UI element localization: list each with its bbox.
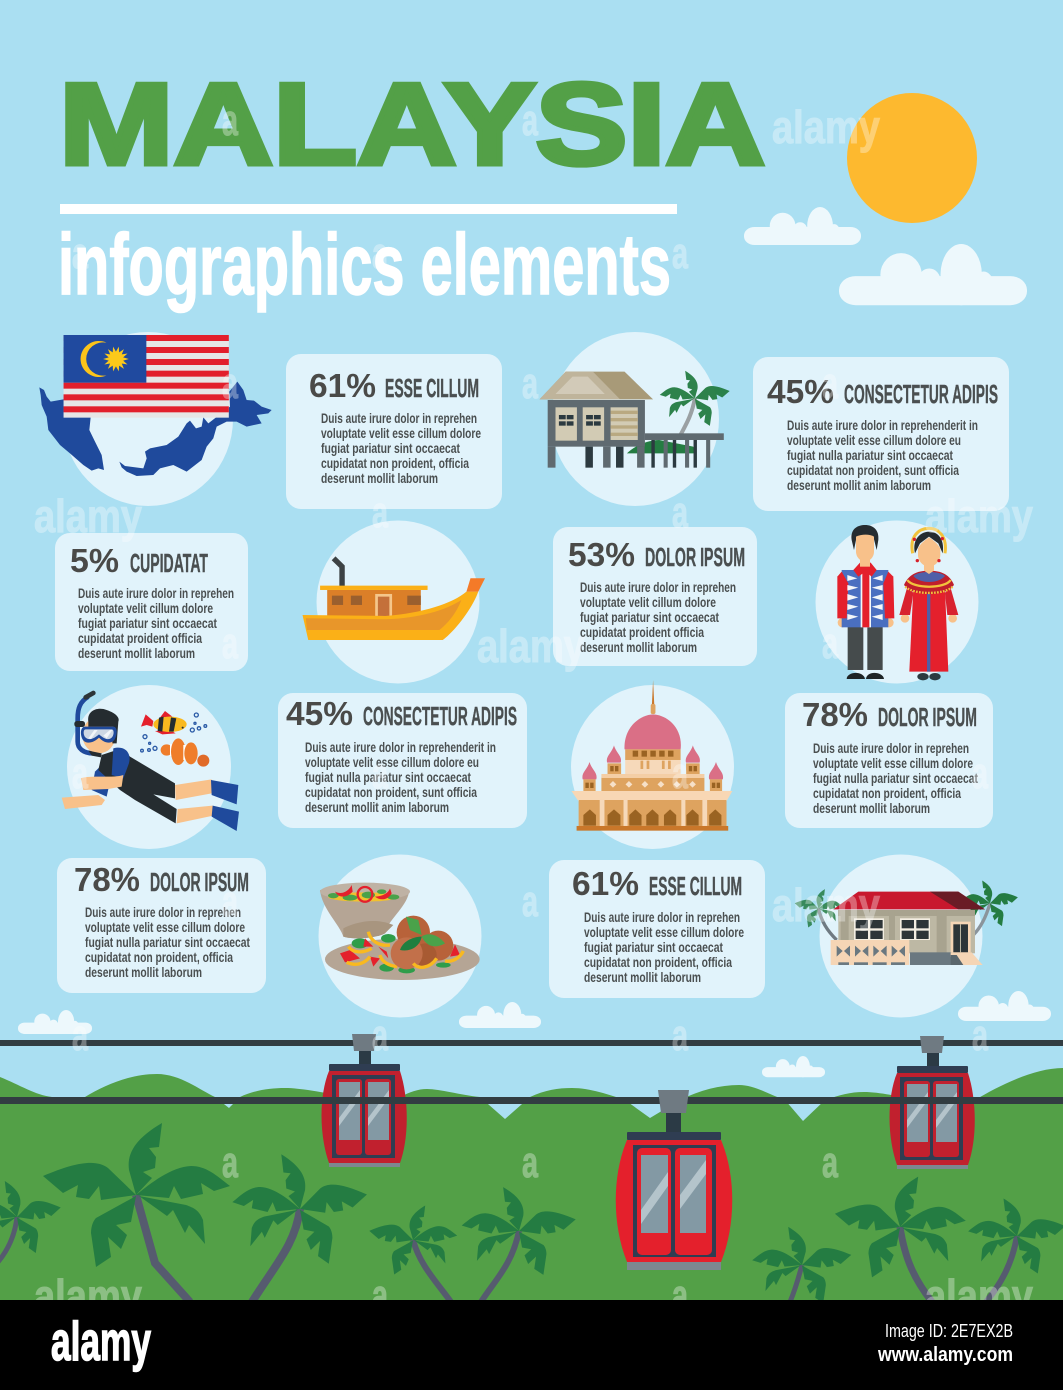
watermarks: a	[372, 749, 388, 798]
bubbles	[141, 713, 207, 752]
watermarks: a	[522, 96, 538, 145]
body text: Duis aute irure dolor in reprehen	[584, 909, 740, 925]
body text: deserunt mollit laborum	[580, 639, 697, 655]
watermarks: a	[222, 619, 238, 668]
panel: 45% consectetur adipis middle	[278, 693, 527, 828]
icon: mosque	[571, 680, 732, 831]
panel: 78% dolor ipsum left	[57, 858, 266, 993]
body text: deserunt mollit laborum	[85, 964, 202, 980]
icon: cloud large	[839, 244, 1027, 305]
panel: 53% dolor ipsum	[553, 527, 757, 666]
icon: cloud lower right	[958, 991, 1051, 1021]
subtitle: infographics elements	[58, 217, 671, 313]
body text: fugiat nulla pariatur sint occaecat	[787, 447, 953, 463]
panel: 61% esse cillum bottom	[549, 860, 765, 998]
watermarks: a	[672, 1011, 688, 1060]
watermarks: a	[72, 1011, 88, 1060]
watermarks: a	[522, 359, 538, 408]
body text: Duis aute irure dolor in reprehen	[85, 904, 241, 920]
percentage: 45%	[767, 373, 834, 410]
body text	[321, 410, 481, 486]
percentage: 78%	[74, 861, 140, 898]
minarets	[582, 745, 723, 791]
watermarks: a	[672, 749, 688, 798]
woman	[899, 528, 958, 680]
body text: cupidatat non proident, officia	[321, 455, 469, 471]
panel: 61% esse cillum	[286, 354, 502, 509]
heading: CUPIDATAT	[130, 548, 208, 578]
body text: fugiat nulla pariatur sint occaecat	[85, 934, 250, 950]
palm trees	[0, 1123, 1063, 1303]
percentage: 45%	[286, 695, 353, 732]
body text: Duis aute irure dolor in reprehenderit in	[305, 739, 496, 755]
body text: cupidatat non proident, sunt officia	[305, 784, 477, 800]
body text: deserunt mollit anim laborum	[305, 799, 449, 815]
heading: DOLOR IPSUM	[645, 542, 745, 572]
body text: cupidatat proident officia	[78, 630, 202, 646]
body text: voluptate velit cillum dolore	[580, 594, 716, 610]
map	[39, 382, 272, 476]
watermarks: a	[372, 1271, 388, 1320]
watermarks: a	[372, 488, 388, 537]
watermarks: a	[222, 359, 238, 408]
fish yellow	[141, 711, 187, 734]
icon: food dishes	[320, 883, 480, 980]
icon: stilt house with palm	[540, 371, 730, 468]
icon: cable car right	[890, 1036, 975, 1169]
body text: cupidatat non proident, officia	[85, 949, 233, 965]
footer logo: alamy	[51, 1310, 151, 1372]
body text: Duis aute irure dolor in reprehenderit in	[787, 417, 978, 433]
footer bar	[0, 1300, 1063, 1390]
watermarks: alamy	[772, 879, 880, 931]
icon: small sky cloud	[762, 1056, 825, 1077]
lower cable	[0, 1097, 1063, 1104]
body text: fugiat nulla pariatur sint occaecat	[813, 770, 978, 786]
body text: fugiat pariatur sint occaecat	[321, 440, 460, 456]
icon: cloud lower middle	[459, 1002, 541, 1028]
watermarks: a	[72, 749, 88, 798]
circle backdrops	[63, 332, 982, 1018]
icon: sun	[847, 93, 977, 223]
body text: fugiat pariatur sint occaecat	[580, 609, 719, 625]
upper cable	[0, 1040, 1063, 1046]
watermarks: alamy	[772, 101, 880, 153]
heading: DOLOR IPSUM	[150, 867, 249, 897]
percentage: 61%	[309, 367, 376, 404]
heading: CONSECTETUR ADIPIS	[363, 701, 517, 731]
website: www.alamy.com	[877, 1344, 1013, 1366]
watermarks: alamy	[925, 490, 1033, 542]
body text: deserunt mollit laborum	[584, 969, 701, 985]
watermarks: a	[672, 229, 688, 278]
body text: voluptate velit esse cillum dolore	[321, 425, 481, 441]
body text	[78, 585, 234, 661]
body text: fugiat pariatur sint occaecat	[584, 939, 723, 955]
icon: cable car left	[322, 1034, 407, 1167]
icon: cable car centre	[616, 1090, 732, 1270]
body text: deserunt mollit anim laborum	[787, 477, 931, 493]
watermarks: a	[822, 619, 838, 668]
watermarks: a	[822, 1138, 838, 1187]
body text: voluptate velit esse cillum dolore	[85, 919, 245, 935]
heading: ESSE CILLUM	[385, 373, 479, 403]
icon: cloud top	[744, 207, 861, 245]
body text: voluptate velit esse cillum dolore	[813, 755, 973, 771]
body text: voluptate velit esse cillum dolore eu	[787, 432, 961, 448]
body text: voluptate velit cillum dolore	[78, 600, 213, 616]
man	[837, 525, 894, 679]
body text	[787, 417, 978, 493]
body text: deserunt mollit laborum	[813, 800, 930, 816]
watermarks: a	[672, 1271, 688, 1320]
heading: ESSE CILLUM	[649, 871, 742, 901]
watermarks: a	[72, 229, 88, 278]
body text: Duis aute irure dolor in reprehen	[321, 410, 477, 426]
body text: cupidatat non proident, officia	[813, 785, 961, 801]
flag	[64, 335, 229, 418]
body text: fugiat pariatur sint occaecat	[78, 615, 217, 631]
panel: landscape hills	[0, 1068, 1063, 1300]
watermarks: a	[222, 1138, 238, 1187]
body text	[305, 739, 496, 815]
body text: voluptate velit esse cillum dolore eu	[305, 754, 479, 770]
percentage: 53%	[568, 536, 635, 573]
body text: cupidatat non proident, sunt officia	[787, 462, 959, 478]
body text: Duis aute irure dolor in reprehen	[580, 579, 736, 595]
watermarks: a	[372, 1011, 388, 1060]
icon: cloud lower left	[18, 1010, 92, 1034]
watermarks: a	[822, 359, 838, 408]
panel: 5% cupidatat	[55, 533, 248, 671]
body text: cupidatat non proident, officia	[584, 954, 732, 970]
heading: DOLOR IPSUM	[878, 702, 977, 732]
watermarks: alamy	[34, 1270, 142, 1322]
fish orange	[161, 738, 209, 767]
panel: 78% dolor ipsum right	[785, 693, 993, 828]
percentage: 61%	[572, 865, 639, 902]
watermarks: a	[372, 229, 388, 278]
icon: scuba diver with fish	[62, 693, 239, 831]
watermarks: a	[522, 877, 538, 926]
watermarks: a	[972, 749, 988, 798]
watermarks: alamy	[477, 620, 585, 672]
percentage: 5%	[70, 542, 119, 579]
body text: voluptate velit esse cillum dolore	[584, 924, 744, 940]
watermarks: a	[672, 488, 688, 537]
icon: villa with palms	[795, 881, 1018, 965]
body text	[584, 909, 744, 985]
icon: traditional couple	[837, 525, 958, 680]
body text: cupidatat proident officia	[580, 624, 704, 640]
icon: wooden boat	[303, 558, 485, 640]
watermarks: a	[972, 1011, 988, 1060]
watermarks: alamy	[925, 1270, 1033, 1322]
watermarks: a	[522, 1138, 538, 1187]
percentage: 78%	[802, 696, 868, 733]
image id: Image ID: 2E7EX2B	[885, 1321, 1013, 1341]
panel: 45% consectetur adipis top	[753, 357, 1009, 511]
title underline	[60, 204, 677, 214]
watermarks: alamy	[34, 490, 142, 542]
body text: fugiat nulla pariatur sint occaecat	[305, 769, 471, 785]
title: MALAYSIA	[59, 59, 765, 189]
body text	[580, 579, 736, 655]
body text	[85, 904, 250, 980]
watermarks: a	[222, 877, 238, 926]
body text: deserunt mollit laborum	[78, 645, 195, 661]
body text: deserunt mollit laborum	[321, 470, 438, 486]
body text: Duis aute irure dolor in reprehen	[78, 585, 234, 601]
body text	[813, 740, 978, 816]
body text: Duis aute irure dolor in reprehen	[813, 740, 969, 756]
icon: Malaysia map and flag	[39, 335, 272, 476]
watermarks: a	[222, 96, 238, 145]
